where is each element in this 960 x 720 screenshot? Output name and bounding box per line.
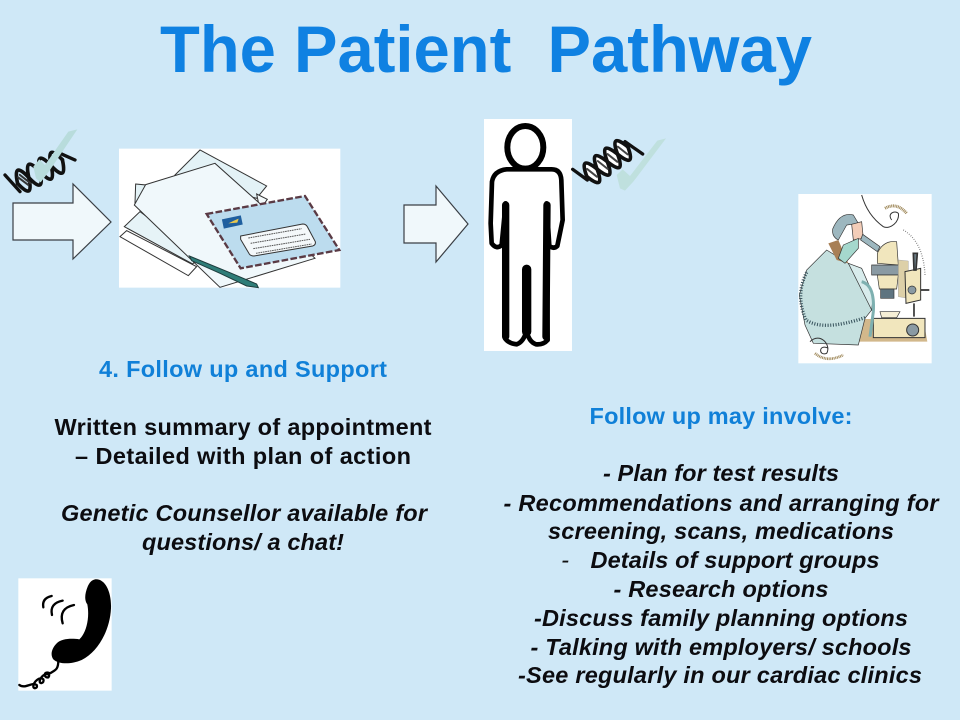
text block: follow up list (504, 460, 940, 688)
panel: letters and envelope image (119, 149, 340, 288)
panel: person figure (484, 119, 572, 351)
title: The Patient Pathway (160, 12, 812, 86)
icon: telephone (18, 578, 112, 691)
text block: written summary: – Detailed with plan of action (75, 443, 411, 469)
text block: genetic counsellor: questions/ a chat! (142, 529, 344, 555)
arrow: first (13, 184, 111, 259)
text block: written summary (54, 414, 432, 469)
heading: follow up and support: 4. Follow up and Support (99, 356, 387, 382)
text block: follow up list: -Discuss family planning options (534, 605, 908, 631)
icon: left check mark (33, 129, 77, 182)
icon: right DNA helix (573, 137, 643, 186)
text block: genetic counsellor (61, 500, 429, 555)
text block: follow up list: - (561, 547, 569, 573)
icon: left DNA helix (5, 149, 75, 194)
panel: scientist at microscope image (798, 194, 932, 363)
arrow: second (404, 186, 468, 262)
heading: follow up may involve: Follow up may involve: (590, 403, 852, 429)
text block: follow up list: - Recommendations and arranging for (504, 490, 940, 516)
text block: follow up list: - Talking with employers/ schools (530, 634, 912, 660)
text block: follow up list: - Research options (614, 576, 828, 602)
text block: genetic counsellor: Genetic Counsellor available for (61, 500, 429, 526)
text block: follow up list: screening, scans, medications (548, 518, 894, 544)
text block: follow up list: Details of support groups (590, 547, 880, 573)
text block: follow up list: -See regularly in our cardiac clinics (518, 662, 922, 688)
icon: right check mark (617, 138, 666, 191)
text block: follow up list: - Plan for test results (603, 460, 839, 486)
text block: written summary: Written summary of appointment (54, 414, 432, 440)
